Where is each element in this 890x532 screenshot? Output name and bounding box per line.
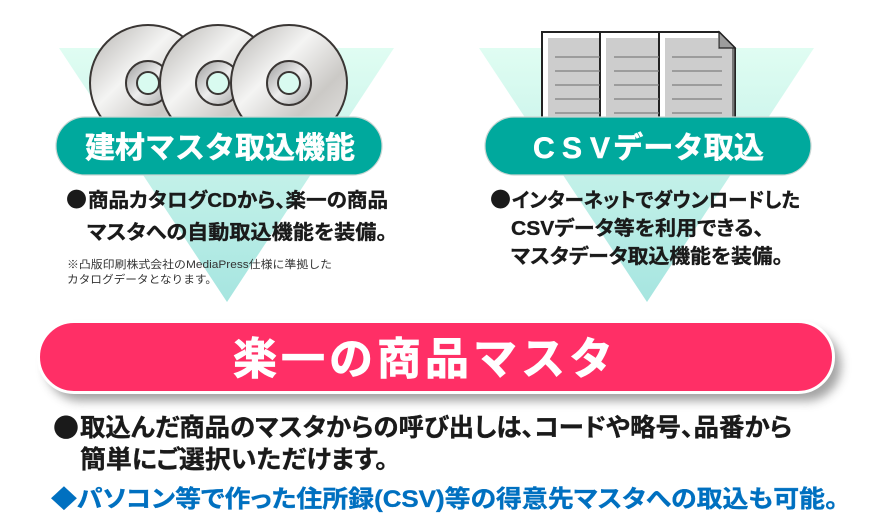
banner pill (38, 322, 834, 392)
text block: master lookup description (53, 408, 792, 474)
panel: product catalog CD import (56, 25, 394, 302)
panel: CSV data import (479, 32, 814, 302)
text block: CSV description: ● (490, 184, 511, 214)
heading pill: building material master import (56, 117, 382, 175)
icon: three document pages (542, 32, 735, 122)
text block: master lookup description: 取込んだ商品のマスタからの呼び出しは、コードや略号、品番から (80, 414, 792, 442)
text block: CSV description: インターネットでダウンロードした (512, 188, 800, 212)
footnote: ※凸版印刷株式会社のMediaPress仕様に準拠した (67, 257, 332, 271)
text block: CSV description: CSVデータ等を利用できる、 (511, 216, 764, 240)
text block: CD description: マスタへの自動取込機能を装備。 (87, 221, 387, 244)
callout: address book CSV import: ◆パソコン等で作った住所録(CSV)等の得意先マスタへの取込も可能。 (51, 486, 838, 513)
text block: master lookup description: ● (53, 408, 79, 445)
text block: CSV description: マスタデータ取込機能を装備。 (511, 244, 783, 268)
heading pill: CSV data import: S (562, 132, 582, 165)
panel: Rakuichi product master (38, 322, 841, 401)
inverted triangle background left (59, 48, 394, 302)
heading pill: CSV data import: C (533, 132, 555, 165)
banner shadow (46, 330, 841, 401)
banner title: 楽一の商品マスタ (233, 335, 613, 384)
icon: three CDs (90, 25, 347, 141)
text block: CD description: 商品カタログCDから、楽一の商品 (88, 188, 388, 212)
text block: master lookup description: 簡単にご選択いただけます。 (80, 445, 388, 474)
text block: CD description: ● (66, 184, 87, 214)
text block: CSV description (490, 184, 800, 268)
text block: CD description (66, 184, 388, 244)
heading pill: CSV data import: データ取込 (613, 131, 764, 165)
heading pill: building material master import: 建材マスタ取込機能 (85, 132, 355, 165)
footnote (67, 257, 332, 286)
heading pill: CSV data import (485, 117, 811, 175)
inverted triangle background right (479, 48, 814, 302)
heading pill: CSV data import: V (590, 132, 610, 165)
footnote: カタログデータとなります。 (67, 272, 217, 286)
